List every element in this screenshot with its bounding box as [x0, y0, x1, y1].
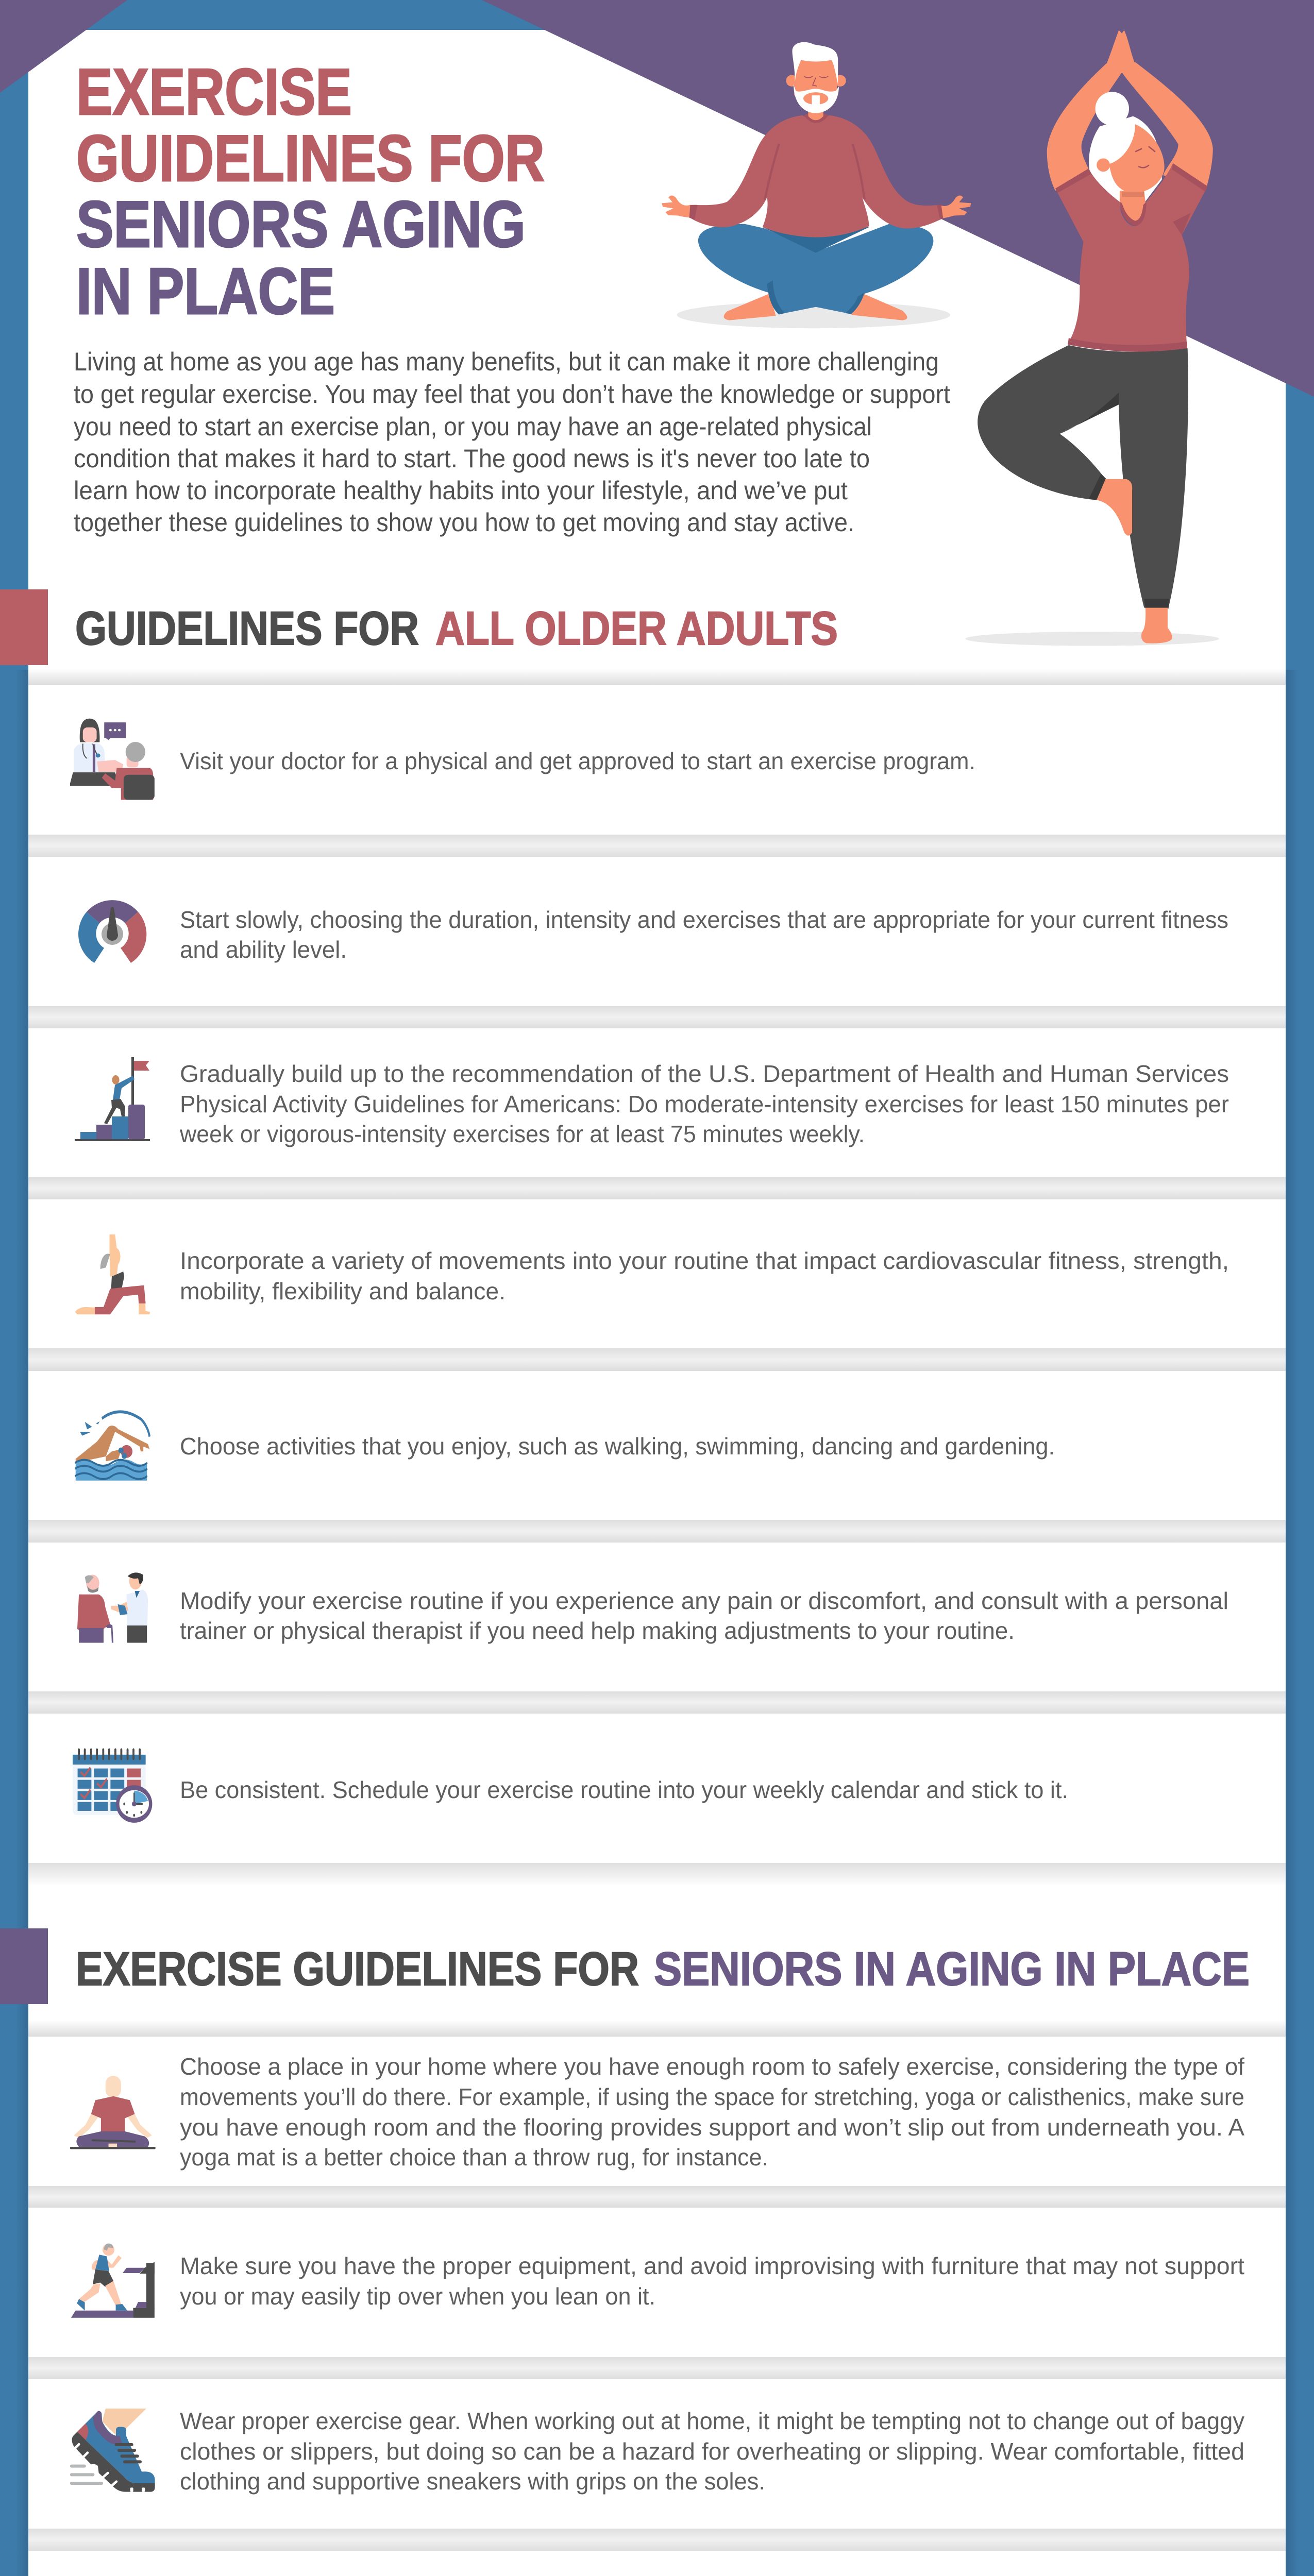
- text: Visit your doctor for a physical and get approved to start an exercise program.: [180, 748, 975, 774]
- heading: guidelines for all older adults: ALL OLDER ADULTS: [435, 602, 838, 655]
- icon: gauge: [78, 900, 146, 963]
- illustration: meditating man: [662, 42, 971, 328]
- text: [179, 1060, 1229, 1147]
- icon: seated meditation: [70, 2076, 156, 2149]
- title: GUIDELINES FOR: [76, 122, 545, 195]
- heading: guidelines for all older adults: GUIDELINES FOR: [75, 602, 419, 655]
- card 3: [28, 1028, 1286, 1199]
- card 7: [28, 1714, 1286, 1886]
- text: [180, 1587, 1228, 1644]
- text: Make sure you have the proper equipment, and avoid improvising with furniture that may not support: [180, 2252, 1244, 2279]
- card 9: [28, 2208, 1286, 2379]
- heading: exercise guidelines for seniors in aging in place: SENIORS IN AGING IN PLACE: [654, 1943, 1250, 1995]
- card 8: [28, 2037, 1286, 2208]
- icon: doctor consultation: [70, 719, 155, 800]
- card 10: [28, 2379, 1286, 2551]
- text: [180, 906, 1228, 963]
- intro text: you need to start an exercise plan, or you may have an age-related physical: [74, 412, 872, 441]
- text: [180, 2053, 1244, 2171]
- text: clothes or slippers, but doing so can be a hazard for overheating or slipping. Wear comfortable, fitted: [180, 2438, 1244, 2465]
- card 6: [28, 1543, 1286, 1714]
- text: you have enough room and the flooring provides support and won’t slip out from underneath you. A: [180, 2114, 1244, 2141]
- text: mobility, flexibility and balance.: [180, 1278, 506, 1304]
- text: [180, 1247, 1229, 1304]
- text: Physical Activity Guidelines for Americans: Do moderate-intensity exercises for least 150 minutes per: [180, 1091, 1229, 1117]
- text: [180, 2408, 1244, 2495]
- card 5: [28, 1371, 1286, 1543]
- intro text: [74, 347, 950, 537]
- text: Incorporate a variety of movements into your routine that impact cardiovascular fitness, strength,: [180, 1247, 1229, 1274]
- text: week or vigorous-intensity exercises for at least 75 minutes weekly.: [179, 1121, 865, 1147]
- text: Choose activities that you enjoy, such as walking, swimming, dancing and gardening.: [180, 1433, 1055, 1460]
- text: you or may easily tip over when you lean on it.: [180, 2283, 655, 2310]
- text: Be consistent. Schedule your exercise routine into your weekly calendar and stick to it.: [180, 1776, 1068, 1803]
- intro text: together these guidelines to show you how to get moving and stay active.: [74, 508, 854, 537]
- icon: yoga lunge: [75, 1234, 150, 1314]
- heading: exercise guidelines for seniors in aging in place: EXERCISE GUIDELINES FOR: [76, 1943, 639, 1995]
- corner triangle: top right: [482, 0, 1314, 397]
- heading: guidelines for all older adults: [75, 602, 838, 655]
- icon: climbing steps to flag: [75, 1057, 150, 1141]
- text: movements you’ll do there. For example, if using the space for stretching, yoga or calisthenics, make sure: [180, 2083, 1244, 2110]
- intro text: to get regular exercise. You may feel that you don’t have the knowledge or support: [74, 380, 950, 409]
- icon: calendar with clock: [73, 1750, 150, 1820]
- icon: swimmer: [75, 1412, 149, 1481]
- text: and ability level.: [180, 936, 347, 963]
- title: SENIORS AGING: [76, 188, 526, 261]
- text: Gradually build up to the recommendation of the U.S. Department of Health and Human Services: [180, 1060, 1229, 1087]
- title: EXERCISE: [76, 55, 352, 128]
- text: yoga mat is a better choice than a throw rug, for instance.: [180, 2144, 768, 2171]
- text: trainer or physical therapist if you need help making adjustments to your routine.: [180, 1617, 1015, 1644]
- section marker: rose: [0, 589, 48, 665]
- intro text: condition that makes it hard to start. The good news is it's never too late to: [74, 444, 870, 473]
- icon: treadmill runner: [71, 2244, 155, 2318]
- card 1: [28, 685, 1286, 857]
- text: Start slowly, choosing the duration, intensity and exercises that are appropriate for your current fitness: [180, 906, 1228, 933]
- card 4: [28, 1199, 1286, 1371]
- text: clothing and supportive sneakers with grips on the soles.: [180, 2468, 765, 2495]
- title: [76, 55, 545, 328]
- text: Modify your exercise routine if you experience any pain or discomfort, and consult with a personal: [180, 1587, 1228, 1614]
- intro text: learn how to incorporate healthy habits into your lifestyle, and we’ve put: [74, 476, 848, 505]
- text: Wear proper exercise gear. When working out at home, it might be tempting not to change out of baggy: [180, 2408, 1244, 2434]
- icon: senior and physical therapist: [77, 1572, 148, 1643]
- illustration: woman in tree pose: [965, 30, 1219, 646]
- card 11: [28, 2551, 1286, 2576]
- card 2: [28, 857, 1286, 1028]
- title: IN PLACE: [76, 255, 335, 328]
- text: Choose a place in your home where you have enough room to safely exercise, considering the type of: [180, 2053, 1244, 2080]
- heading: exercise guidelines for seniors in aging in place: [76, 1943, 1250, 1995]
- corner triangle: top left: [0, 0, 127, 93]
- section marker: purple: [0, 1928, 48, 2004]
- icon: running shoe: [70, 2409, 155, 2492]
- text: [180, 2252, 1244, 2310]
- intro text: Living at home as you age has many benefits, but it can make it more challenging: [74, 347, 939, 376]
